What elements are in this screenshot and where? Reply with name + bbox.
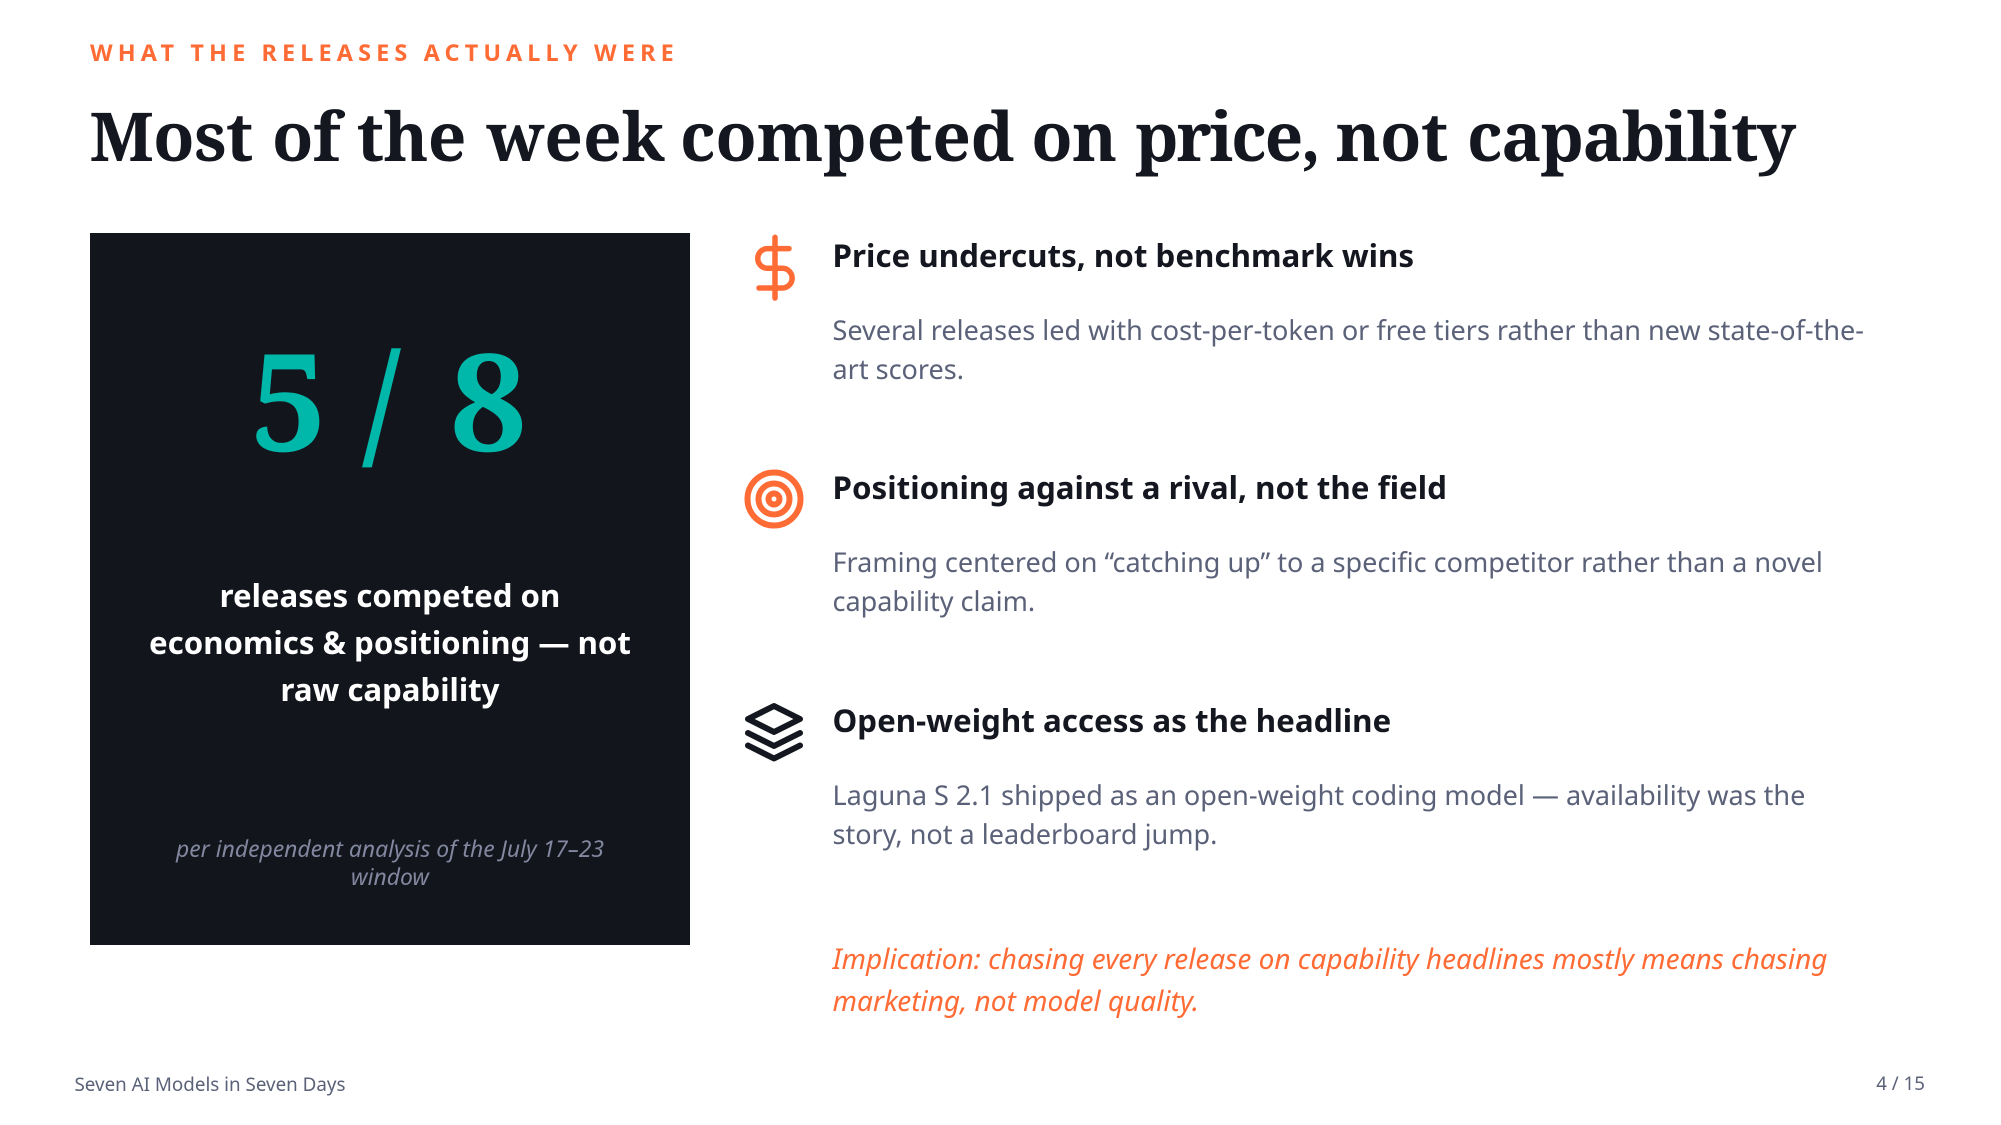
text: open-weight: story, not a leaderboard jump. — [832, 815, 1217, 852]
text: price undercuts — [832, 311, 1864, 387]
panel: key stat — [90, 233, 690, 945]
stat description: raw capability — [281, 669, 499, 711]
title: Most of the week competed on price, not capability — [90, 89, 1795, 181]
text: positioning: capability claim. — [832, 582, 1035, 619]
eyebrow: WHAT THE RELEASES ACTUALLY WERE — [90, 36, 679, 68]
text: open-weight — [832, 776, 1805, 852]
stat description: economics & positioning — not — [149, 622, 631, 664]
heading: positioning: Positioning against a rival, not the field — [832, 466, 1447, 508]
text: positioning: Framing centered on “catching up” to a specific competitor rather than a novel — [832, 542, 1823, 580]
text: open-weight: Laguna S 2.1 shipped as an open-weight coding model — availability was the — [832, 776, 1805, 813]
footer: page number: 4 / 15 — [1876, 1071, 1925, 1096]
stat source note: window — [351, 861, 429, 892]
heading: open-weight: Open-weight access as the headline — [832, 698, 1391, 742]
icon: layers — [745, 703, 803, 762]
icon: target — [744, 470, 804, 528]
footer: deck title: Seven AI Models in Seven Days — [74, 1071, 345, 1097]
text: price undercuts: Several releases led with cost-per-token or free tiers rather than new state-of-the- — [832, 311, 1864, 348]
stat description: releases competed on — [220, 575, 560, 617]
implication callout: marketing, not model quality. — [832, 982, 1199, 1020]
implication callout: Implication: chasing every release on capability headlines mostly means chasing — [832, 940, 1827, 978]
big stat: 5 / 8 — [250, 306, 526, 491]
heading: price undercuts: Price undercuts, not benchmark wins — [832, 234, 1414, 277]
text: price undercuts: art scores. — [832, 350, 964, 387]
text: positioning — [832, 542, 1823, 619]
stat description — [149, 575, 631, 711]
stat source note — [176, 833, 604, 892]
stat source note: per independent analysis of the July 17–23 — [176, 833, 604, 864]
icon: dollar sign — [755, 234, 795, 301]
implication callout — [832, 940, 1827, 1020]
